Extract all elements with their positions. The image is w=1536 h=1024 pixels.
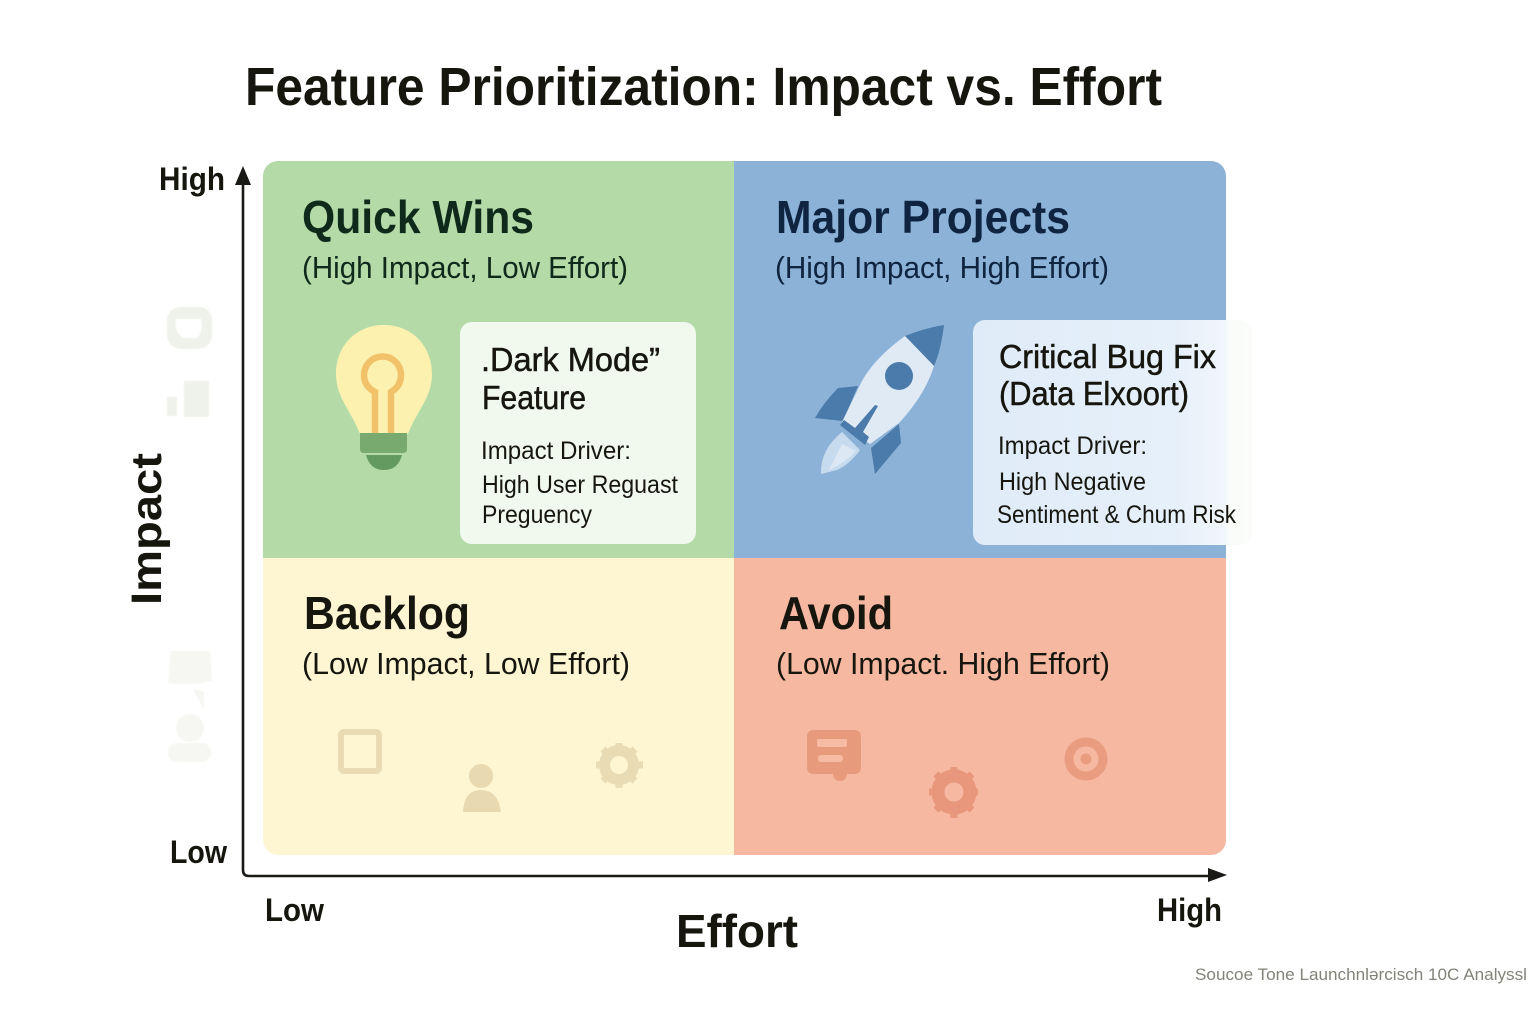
- card detail line 2: Preguency: [482, 501, 592, 529]
- source note: Soucoe Tone Launchnlərcisch 10C Analyssl: [1195, 965, 1527, 984]
- panel: backlog text: [302, 587, 630, 681]
- card heading: .Dark Mode”: [481, 341, 660, 378]
- heading: backlog: Backlog: [304, 587, 470, 639]
- quadrant grid: [263, 161, 1226, 855]
- y axis label: High: High: [159, 161, 225, 197]
- icon: rocket: [815, 325, 944, 474]
- y axis title: Impact: [123, 453, 171, 605]
- panel: major projects text: [775, 191, 1109, 285]
- card detail line 1: High Negative: [999, 468, 1146, 496]
- panel: major projects background: [734, 161, 1226, 558]
- heading: major projects: Major Projects: [776, 191, 1070, 243]
- panel: backlog background: [263, 558, 734, 855]
- axes with arrows: [235, 166, 1227, 882]
- heading: avoid: Avoid: [779, 587, 893, 639]
- card: dark mode feature: [460, 322, 696, 544]
- x axis title: Effort: [676, 905, 798, 957]
- icon: light bulb: [336, 325, 432, 470]
- card heading line 2: (Data Elxoort): [999, 375, 1189, 412]
- icon: faded chat and person: [168, 651, 212, 762]
- subheading: backlog: (Low Impact, Low Effort): [302, 646, 630, 681]
- panel: avoid text: [776, 587, 1110, 681]
- icon: gear: [929, 767, 978, 818]
- card detail line 1: High User Reguast: [482, 471, 678, 499]
- icon: faded person: [463, 764, 501, 812]
- card detail line 2: Sentiment & Chum Risk: [997, 501, 1236, 529]
- title: Feature Prioritization: Impact vs. Effort: [245, 57, 1162, 117]
- card label: Impact Driver:: [481, 437, 631, 465]
- y axis label: Low: Low: [170, 834, 227, 870]
- x axis label: High: High: [1157, 892, 1222, 928]
- panel: quick wins background: [263, 161, 734, 558]
- icon: faded square: [341, 732, 379, 771]
- card: critical bug fix: [973, 320, 1252, 545]
- icon: faded gear: [596, 743, 643, 788]
- panel: quick wins text: [302, 191, 628, 285]
- icon: chat bubble: [807, 730, 861, 781]
- subheading: major projects: (High Impact, High Effort): [775, 250, 1109, 285]
- card heading: Critical Bug Fix: [999, 338, 1216, 375]
- icon: target: [1069, 742, 1103, 776]
- card label: Impact Driver:: [998, 432, 1147, 460]
- heading: quick wins: Quick Wins: [302, 191, 534, 243]
- card heading line 2: Feature: [482, 379, 586, 416]
- x axis label: Low: Low: [265, 892, 324, 928]
- subheading: avoid: (Low Impact. High Effort): [776, 646, 1110, 681]
- subheading: quick wins: (High Impact, Low Effort): [302, 250, 628, 285]
- panel: avoid background: [734, 558, 1226, 855]
- icon: faded target and bars: [167, 307, 212, 417]
